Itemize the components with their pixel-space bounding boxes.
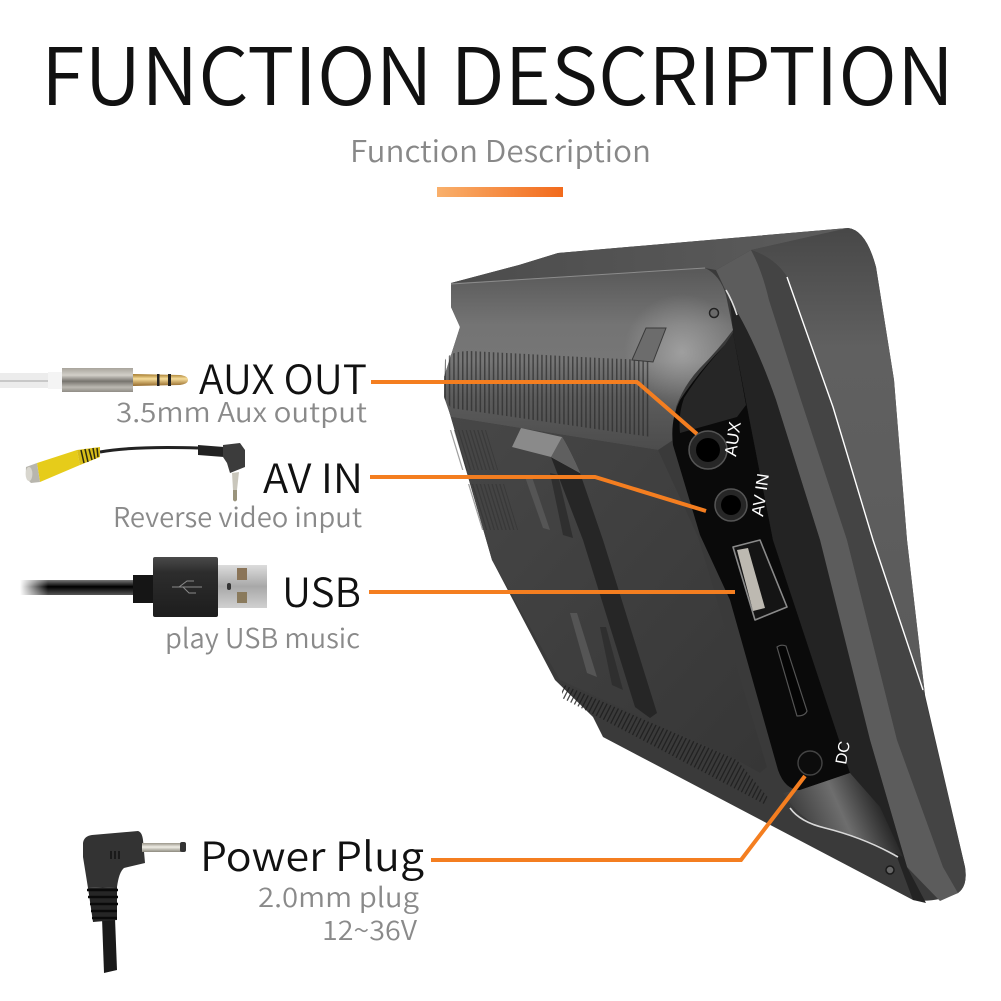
- device: monitor rear view: [440, 228, 966, 903]
- rear shell upper: [444, 268, 733, 450]
- white glint on bezel: [726, 290, 737, 315]
- icon: DC power plug: [83, 831, 186, 973]
- top surface: [451, 228, 848, 283]
- rear panel: [451, 417, 767, 773]
- port label: DC: DC: [833, 740, 854, 766]
- port label: AV IN: AV IN: [748, 472, 773, 518]
- shell top highlight: [451, 268, 705, 284]
- leader line: Power Plug: [431, 776, 805, 860]
- lower ventilation slots: [556, 685, 770, 795]
- icon: USB cable: [20, 557, 267, 617]
- sublabel: play USB music: play USB music: [165, 617, 360, 656]
- stand head: [512, 428, 580, 473]
- label: AUX OUT: AUX OUT: [199, 348, 367, 406]
- sublabel: 3.5mm Aux output: 3.5mm Aux output: [116, 391, 367, 430]
- port panel upper recess: [680, 333, 746, 433]
- device silhouette: [444, 228, 966, 901]
- shell glint: [636, 304, 726, 401]
- small hatch: [632, 328, 666, 362]
- screw top: [710, 308, 718, 318]
- bezel grey band: [716, 250, 958, 901]
- AV IN port: [715, 489, 747, 521]
- bezel inner dark band: [730, 300, 926, 903]
- leader line: AV IN: [370, 477, 706, 511]
- curved gloss corner: [783, 773, 903, 857]
- SD card slot: [777, 645, 807, 716]
- white edge line: [787, 277, 923, 690]
- ventilation slots upper: [444, 351, 648, 436]
- label: AV IN: AV IN: [263, 447, 363, 505]
- rear panel vents upper: [456, 430, 492, 470]
- AUX port: [689, 431, 727, 469]
- icon: 3.5mm aux cable: [0, 368, 188, 392]
- bezel outer dark band: [751, 250, 966, 893]
- DC port: [798, 751, 822, 775]
- stand slots: [525, 477, 550, 530]
- sublabel: 12~36V: 12~36V: [322, 909, 418, 948]
- screw bottom: [886, 866, 894, 874]
- label: USB: USB: [282, 561, 361, 619]
- orange accent bar: [437, 187, 563, 197]
- leader line: AUX OUT: [371, 382, 697, 434]
- sublabel: 2.0mm plug: 2.0mm plug: [258, 876, 419, 915]
- leader line: USB: [369, 590, 735, 594]
- title: FUNCTION DESCRIPTION: [41, 13, 954, 128]
- screen side wedge: [751, 228, 925, 695]
- USB port: [733, 540, 787, 620]
- USB trident glyph: [172, 581, 202, 593]
- stand bracket: [551, 457, 657, 718]
- port panel: [672, 333, 850, 790]
- icon: RCA AV cable: [26, 443, 245, 502]
- port label: AUX: AUX: [721, 420, 745, 458]
- subtitle: Function Description: [350, 127, 651, 171]
- gloss rim line: [790, 808, 898, 857]
- label: Power Plug: Power Plug: [200, 825, 424, 883]
- rear panel vents lower: [475, 484, 511, 530]
- sublabel: Reverse video input: Reverse video input: [113, 496, 362, 535]
